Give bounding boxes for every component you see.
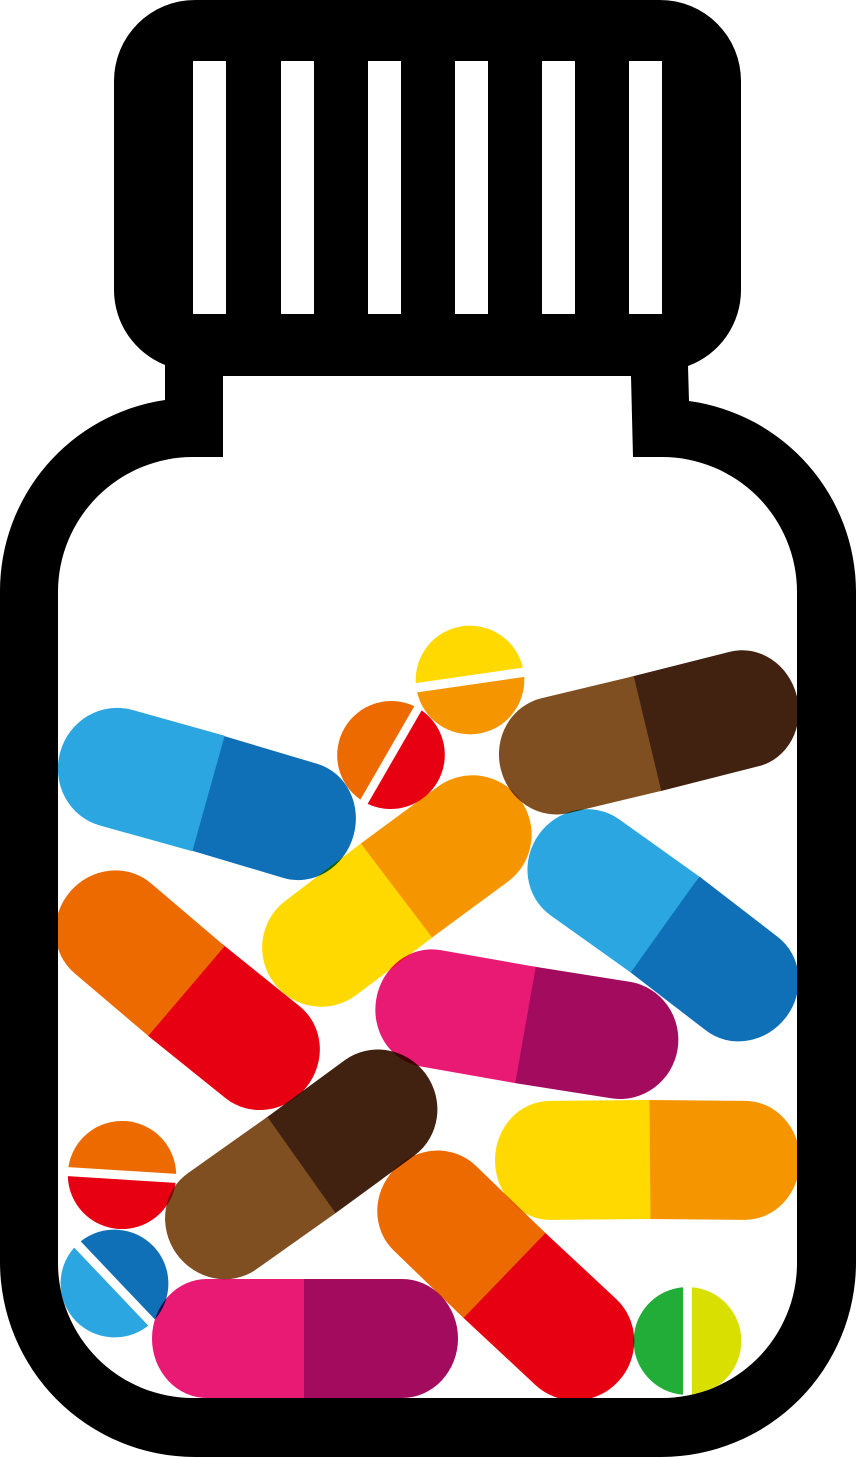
capsule: pink and purple, centre: [375, 949, 678, 1099]
capsule: brown and dark brown, lower centre: [165, 1050, 438, 1280]
capsule: light blue and blue, right: [527, 809, 797, 1042]
capsule: pink and purple, bottom: [152, 1279, 458, 1398]
tablet: orange and red: [337, 701, 445, 809]
capsule: orange and red, left: [58, 870, 320, 1110]
tablet: orange and red, lower left: [68, 1121, 176, 1229]
capsule: light blue and blue, top left: [58, 708, 356, 880]
tablet: green and lime: [634, 1287, 741, 1395]
capsule: yellow and orange, horizontal: [494, 1100, 801, 1220]
tablet: light blue and blue: [60, 1230, 168, 1338]
pills inside bottle: [58, 626, 797, 1398]
capsule: orange and red, bottom: [377, 1150, 634, 1398]
bottle cap slots: [193, 61, 662, 314]
capsule: brown and dark brown, top right: [498, 650, 797, 814]
capsule: yellow and orange, centre: [262, 775, 532, 1007]
tablet: yellow and orange: [416, 626, 524, 734]
